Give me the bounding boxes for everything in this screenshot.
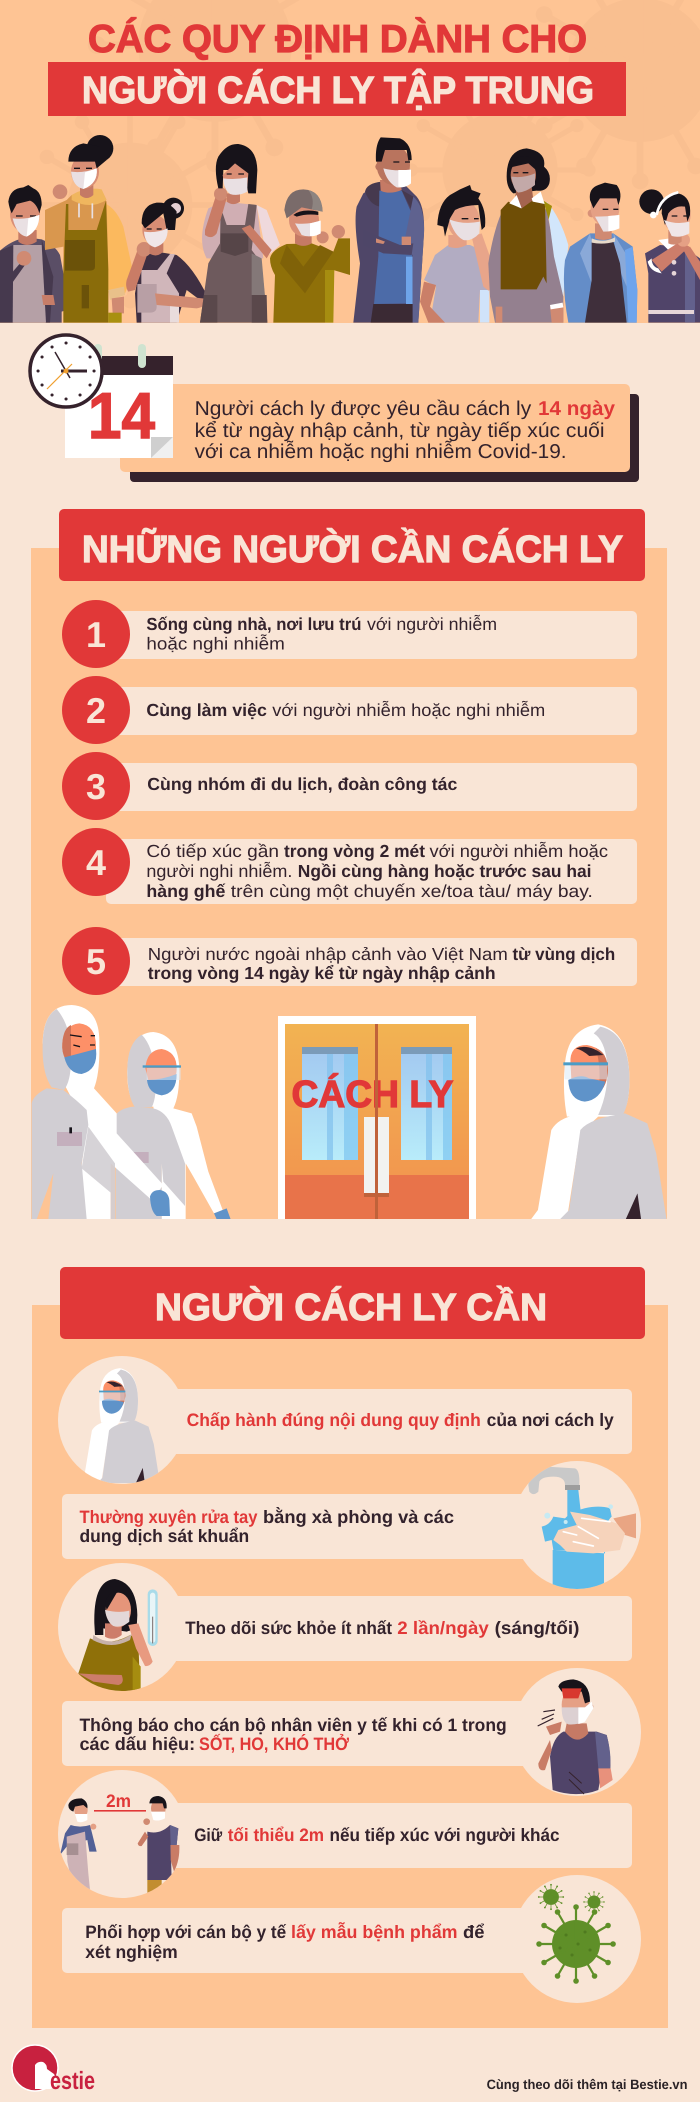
item 1: hoặc nghi nhiễm bbox=[146, 634, 285, 654]
callout text: Người cách ly được yêu cầu cách ly bbox=[195, 398, 531, 420]
illustration: quarantine door bbox=[278, 1016, 476, 1219]
rule 3 bbox=[58, 1563, 632, 1692]
illustration: health workers left bbox=[32, 1005, 231, 1219]
worker back bbox=[116, 1032, 231, 1219]
rule 5: nếu tiếp xúc với người khác bbox=[330, 1825, 560, 1845]
clock icon bbox=[30, 335, 102, 407]
callout shadow bbox=[130, 394, 639, 482]
person 9 bbox=[564, 183, 637, 323]
heading: NHỮNG NGƯỜI CẦN CÁCH LY bbox=[82, 527, 623, 571]
person 7 bbox=[420, 185, 498, 323]
rule 1: của nơi cách ly bbox=[487, 1410, 614, 1430]
rule 1 bbox=[58, 1356, 632, 1484]
item 4: Có tiếp xúc gần bbox=[146, 841, 279, 861]
callout box bbox=[120, 384, 630, 472]
item 1: 1 bbox=[86, 614, 106, 655]
icon: coughing man bbox=[538, 1679, 613, 1794]
item 1: Sống cùng nhà, nơi lưu trú bbox=[146, 614, 361, 634]
rule 6: để bbox=[463, 1922, 484, 1942]
item 4: hàng ghế bbox=[146, 881, 226, 901]
rule 5: Giữ bbox=[194, 1825, 223, 1845]
panel background bbox=[32, 1305, 668, 2028]
person 1 bbox=[0, 185, 68, 323]
item 5: trong vòng 14 ngày kể từ ngày nhập cảnh bbox=[148, 963, 496, 983]
person 2 bbox=[45, 135, 133, 323]
callout text bbox=[195, 398, 616, 463]
person 6 bbox=[353, 137, 424, 323]
rule 2: dung dịch sát khuẩn bbox=[80, 1526, 249, 1546]
rule 4: các dấu hiệu: bbox=[80, 1734, 195, 1754]
item 1: với người nhiễm bbox=[367, 614, 497, 634]
item 4: trên cùng một chuyến xe/toa tàu/ máy bay. bbox=[231, 881, 593, 901]
item 4: 4 bbox=[86, 842, 106, 883]
rule 6: Phối hợp với cán bộ y tế bbox=[85, 1922, 287, 1942]
calendar icon bbox=[65, 344, 173, 458]
logo: Bestie: estie bbox=[50, 2067, 95, 2095]
item 2: 2 bbox=[86, 690, 106, 731]
person 4 bbox=[200, 144, 280, 323]
rule 2: Thường xuyên rửa tay bbox=[80, 1507, 258, 1527]
icon: woman with thermometer bbox=[78, 1579, 158, 1692]
item 2 bbox=[62, 676, 637, 744]
item 3: Cùng nhóm đi du lịch, đoàn công tác bbox=[147, 774, 458, 794]
heading: NGƯỜI CÁCH LY CẦN bbox=[155, 1285, 547, 1329]
panel: what people need to do bbox=[32, 1267, 668, 2028]
item 4 bbox=[62, 828, 637, 904]
rule 5 bbox=[58, 1770, 632, 1898]
person 5 bbox=[270, 189, 350, 323]
title line two: NGƯỜI CÁCH LY TẬP TRUNG bbox=[82, 68, 594, 112]
icon: two metre distance bbox=[60, 1791, 179, 1893]
worker front bbox=[32, 1005, 170, 1219]
rule 2: bằng xà phòng và các bbox=[263, 1506, 454, 1527]
title banner bbox=[48, 62, 626, 116]
rule 6 bbox=[62, 1875, 641, 2003]
callout text: 14 ngày bbox=[538, 398, 616, 420]
rule 6: xét nghiệm bbox=[85, 1942, 178, 1962]
item 1 bbox=[62, 600, 637, 668]
rule 1: Chấp hành đúng nội dung quy định bbox=[187, 1410, 481, 1430]
item 4: với người nhiễm hoặc bbox=[430, 841, 608, 861]
item 2: Cùng làm việc bbox=[146, 700, 267, 720]
illustration: crowd left bbox=[0, 135, 350, 323]
logo: Bestie bbox=[12, 2045, 95, 2095]
title line one: CÁC QUY ĐỊNH DÀNH CHO bbox=[88, 17, 587, 61]
rule 2 bbox=[62, 1461, 641, 1590]
item 5: Người nước ngoài nhập cảnh vào Việt Nam bbox=[148, 944, 508, 964]
rule 4: SỐT, HO, KHÓ THỞ bbox=[199, 1733, 350, 1754]
item 5: từ vùng dịch bbox=[512, 944, 615, 964]
item 4: trong vòng 2 mét bbox=[284, 841, 425, 861]
door sign text: CÁCH LY bbox=[292, 1073, 454, 1116]
item 4: Ngồi cùng hàng hoặc trước sau hai bbox=[298, 861, 592, 881]
distance label: 2m bbox=[106, 1791, 131, 1811]
item 3: 3 bbox=[86, 766, 106, 807]
rule 5: tối thiểu 2m bbox=[228, 1825, 324, 1845]
panel: who needs quarantine bbox=[31, 509, 667, 1219]
heading bbox=[59, 509, 645, 581]
item 4: người nghi nhiễm. bbox=[146, 861, 292, 881]
rule 3: 2 lần/ngày bbox=[397, 1618, 489, 1638]
item 5 bbox=[62, 927, 637, 995]
item 2: với người nhiễm hoặc nghi nhiễm bbox=[272, 700, 545, 720]
title bbox=[48, 17, 626, 116]
illustration: crowd right bbox=[353, 137, 700, 323]
item 3 bbox=[62, 752, 637, 820]
rule 4 bbox=[62, 1668, 641, 1796]
lower page cover bbox=[0, 323, 700, 343]
rule 6: lấy mẫu bệnh phẩm bbox=[291, 1922, 458, 1942]
calendar icon: 14 bbox=[88, 379, 155, 452]
callout: 14 days quarantine bbox=[30, 335, 639, 482]
icon: health worker bbox=[80, 1368, 160, 1483]
icon: hand washing bbox=[528, 1467, 636, 1590]
heading bbox=[60, 1267, 645, 1339]
panel background bbox=[31, 548, 667, 1219]
person 3 bbox=[126, 198, 208, 323]
item 5: 5 bbox=[86, 941, 106, 982]
person 8 bbox=[488, 148, 568, 323]
icon: virus bbox=[539, 1885, 613, 1981]
rule 3: (sáng/tối) bbox=[495, 1618, 579, 1638]
rule 3: Theo dõi sức khỏe ít nhất bbox=[185, 1618, 392, 1638]
callout text: kể từ ngày nhập cảnh, từ ngày tiếp xúc cuối bbox=[195, 420, 605, 442]
rule 4: Thông báo cho cán bộ nhân viên y tế khi có 1 trong bbox=[80, 1715, 507, 1735]
callout text: với ca nhiễm hoặc nghi nhiễm Covid-19. bbox=[195, 440, 567, 463]
footer credit: Cùng theo dõi thêm tại Bestie.vn bbox=[487, 2077, 688, 2092]
person 10 bbox=[639, 189, 700, 323]
illustration: health worker right bbox=[531, 1024, 666, 1219]
hero background with viruses bbox=[0, 0, 700, 324]
